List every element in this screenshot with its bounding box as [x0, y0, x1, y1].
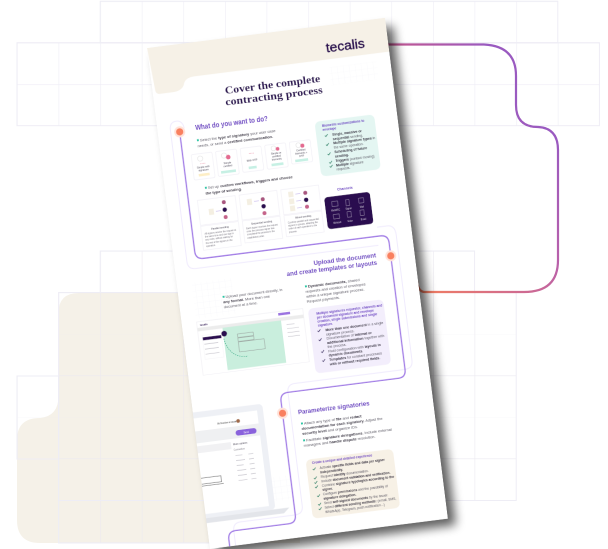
panel: biometric customizations: Multiple signature types in	[333, 136, 376, 146]
panel: unique and detailed experience: Select different sending methods: (email, SMS,	[324, 497, 397, 510]
section 3 heading: Parameterize signatories	[298, 400, 370, 416]
panel: unique and detailed experience: Send self-signed documents by the issuer.	[324, 493, 389, 505]
panel: biometric customizations: Scheduling of future	[334, 146, 367, 154]
section 1 bullet 2: Set up custom workflows, triggers and choose	[208, 174, 294, 190]
laptop mockup	[193, 404, 289, 523]
panel: unique and detailed experience: signature delegation.	[323, 493, 357, 501]
card: mixed sending: order of each operation to the	[288, 224, 318, 231]
card: sequential sending	[239, 190, 283, 243]
card: certified OTP: Certified	[296, 148, 306, 152]
section 2 right bullet: Dynamic documents, shared	[308, 277, 360, 289]
panel: channels: Voice	[347, 221, 354, 223]
panel: multiple signature requests: Multiple signatures requester, channels and	[316, 304, 382, 316]
section 3 bullet 2: managers and handle dispute resolution.	[303, 434, 376, 448]
section 3 bullet 2: Facilitate signature delegations. Include external	[306, 427, 392, 443]
pale outline of the process line	[170, 120, 412, 546]
section 3 bullet 1: documentation for each signatory. Adjust the	[301, 416, 383, 431]
panel: biometric customizations: Triggers (contact moving)	[335, 154, 375, 163]
card: parallel sending: the same time and can sign in	[205, 232, 235, 239]
step markers	[174, 126, 396, 419]
section 3 bullet 1: security level and organize IDs.	[302, 424, 358, 436]
dashed arrow	[223, 338, 248, 357]
document editor mockup	[197, 309, 309, 375]
section 1 bullet 1: Select the type of signatory your user case	[200, 128, 276, 142]
panel: channels: WebRTC	[331, 210, 341, 213]
card: sequential sending: once the previous signer has	[247, 227, 275, 234]
panel: multiple signature requests	[308, 299, 391, 374]
panel: biometric customizations: the same operation.	[334, 142, 364, 150]
panel: biometric customizations	[314, 114, 381, 177]
form fields	[237, 331, 265, 352]
card: sequential sending: completed the process in the	[247, 230, 276, 237]
panel: multiple signature requests: per document signature and envelope	[317, 309, 374, 320]
panel: biometric customizations: Biometric customizations to	[322, 119, 365, 128]
card: parallel sending: any order, without waiting for	[205, 235, 233, 242]
panel: channels	[324, 192, 374, 229]
right sidebar	[287, 323, 300, 337]
sending workflow cards	[197, 185, 325, 250]
title: Cover the complete	[224, 74, 321, 97]
header beige band	[147, 18, 391, 95]
card: certified OTP: biometric +	[295, 151, 308, 156]
tilted document page	[127, 18, 448, 549]
card: mixed sending: Combine parallel and sequential	[288, 218, 320, 225]
card: parallel sending: the rest of the signers in the	[206, 238, 233, 245]
panel: multiple signature requests: creation, single submissions and single	[317, 312, 378, 324]
panel: channels: Email	[361, 219, 367, 222]
section 1 heading: What do you want to do?	[195, 116, 268, 132]
card: simple: Simple with	[197, 165, 210, 170]
background: beige shape	[17, 293, 300, 543]
section 2 heading: Upload the document	[313, 252, 377, 267]
page shadow	[155, 26, 456, 549]
card: with OTP	[240, 146, 264, 172]
card: simple certified: certified	[223, 164, 233, 168]
card: sequential sending: Each signer receives the request	[246, 224, 278, 231]
section 2 left bullet: any format. More than one	[223, 294, 270, 304]
laptop mockup: Connection	[234, 447, 246, 452]
section 2 right bullet: within a unique signature process.	[306, 287, 365, 299]
section 2 heading: and create templates or layouts	[286, 260, 378, 278]
card: mixed sending	[281, 185, 324, 237]
panel: unique and detailed experience: Configure permissions and the possibility of	[323, 484, 388, 497]
card: parallel sending	[197, 196, 241, 250]
section 3 bullet 1: Attach any type of file and redact	[304, 413, 363, 426]
panel: channels: Webcall	[333, 222, 342, 225]
laptop mockup: Mr Nombre el usuario	[217, 420, 239, 426]
card: with OTP: • • • •	[249, 153, 254, 155]
card: parallel sending: Parallel sending	[211, 226, 230, 231]
panel: biometric customizations: sending.	[335, 153, 349, 159]
panel: multiple signature requests: signature.	[318, 322, 333, 328]
card: certified OTP	[289, 140, 313, 164]
panel: multiple signature requests: additional information together with	[327, 334, 385, 345]
panel: unique and detailed experience: independently.	[320, 468, 343, 475]
panel: biometric customizations: Multiple signature	[336, 160, 364, 167]
panel: unique and detailed experience: WhatsApp, Telegram, push notification...)	[325, 503, 385, 514]
card: biometric: Simple or	[271, 151, 282, 156]
card: biometric: biometric	[272, 157, 283, 162]
panel: unique and detailed experience: signer.	[322, 487, 333, 492]
panel: unique and detailed experience: Combine signature typologies according to the	[322, 475, 394, 488]
card: simple certified: Simple	[223, 161, 232, 165]
background: grid top	[17, 1, 599, 126]
card: simple	[191, 152, 215, 180]
section 2 left bullet	[222, 288, 282, 308]
connector line behind page	[386, 44, 558, 292]
panel: biometric customizations: sequential sending.	[333, 133, 363, 141]
section 2 left bullet: document at a time.	[224, 300, 258, 309]
card: mixed sending: Mixed sending	[295, 215, 312, 220]
panel: multiple signature requests: with or without required fields.	[329, 356, 381, 366]
section 2 right bullet: requests and creation of envelopes	[305, 281, 366, 294]
document editor mockup: tecalis	[200, 323, 208, 327]
card: sequential sending: Sequential sending	[251, 220, 273, 226]
panel: biometric customizations: envelope	[322, 126, 337, 132]
section 1 bullet 2: the type of sending.	[205, 186, 242, 196]
section 2 right bullet: Request payments.	[306, 295, 340, 304]
panel: channels: Mail	[360, 207, 365, 209]
left sidebar	[202, 333, 224, 359]
card: with OTP: With OTP	[247, 158, 258, 163]
panel: unique and detailed experience: Include document validation and verification.	[321, 471, 391, 483]
section 2 right bullet	[304, 278, 366, 303]
panel: biometric customizations: Single, massive or	[332, 129, 363, 137]
process line	[180, 137, 406, 546]
title: contracting process	[225, 85, 323, 108]
panel: multiple signature requests: Templates for constant processes	[329, 351, 382, 362]
section 2 left bullet: Upload your document directly, in	[225, 287, 283, 299]
panel: multiple signature requests: More than one document in a single	[325, 321, 384, 332]
section 1 bullet 1: needs, or send a certified communication.	[197, 134, 273, 148]
panel: multiple signature requests: Fluid configuration with layouts in	[328, 343, 381, 354]
pale background grids	[167, 61, 429, 508]
channels heading: Channels	[337, 186, 353, 192]
logo: tecalis	[325, 36, 366, 56]
card: parallel sending: All signers receive the request at	[204, 229, 237, 236]
laptop mockup: Send	[244, 432, 250, 434]
card: mixed sending: signers in groups, adapting the	[288, 221, 319, 228]
card: certified OTP: OTP	[299, 154, 305, 158]
panel: unique and detailed experience: Activate specific fields and data per signer	[319, 458, 386, 470]
background: grid bottom	[17, 251, 516, 543]
card: simple: signature	[198, 168, 210, 172]
panel: multiple signature requests: dynamic documents.	[328, 349, 363, 358]
panel: unique and detailed experience: Create a unique and detailed experience	[312, 453, 373, 465]
laptop mockup: More options	[233, 441, 248, 446]
card: simple: • • • •	[200, 163, 206, 166]
card: biometric: certified	[272, 154, 282, 159]
panel: unique and detailed experience	[306, 449, 400, 519]
section 1 bullet 2	[204, 176, 293, 195]
green canvas	[222, 320, 286, 370]
card: sequential sending: established order.	[247, 234, 265, 240]
panel: channels: Signal	[346, 208, 352, 211]
card: simple certified	[215, 149, 239, 177]
card: parallel sending: operation.	[206, 244, 216, 248]
panel: multiple signature requests: signature process.	[326, 329, 355, 337]
section 2 heading	[286, 253, 378, 276]
card: mixed sending: process.	[289, 230, 298, 234]
panel: biometric customizations: requests.	[336, 166, 351, 172]
signature type cards	[191, 140, 313, 180]
card: biometric	[265, 143, 288, 169]
panel: multiple signature requests: Documentation of internal or	[326, 331, 373, 341]
title	[225, 76, 323, 106]
panel: unique and detailed experience: Request identity documentation.	[321, 469, 369, 479]
panel: multiple signature requests: the process.	[327, 343, 347, 349]
